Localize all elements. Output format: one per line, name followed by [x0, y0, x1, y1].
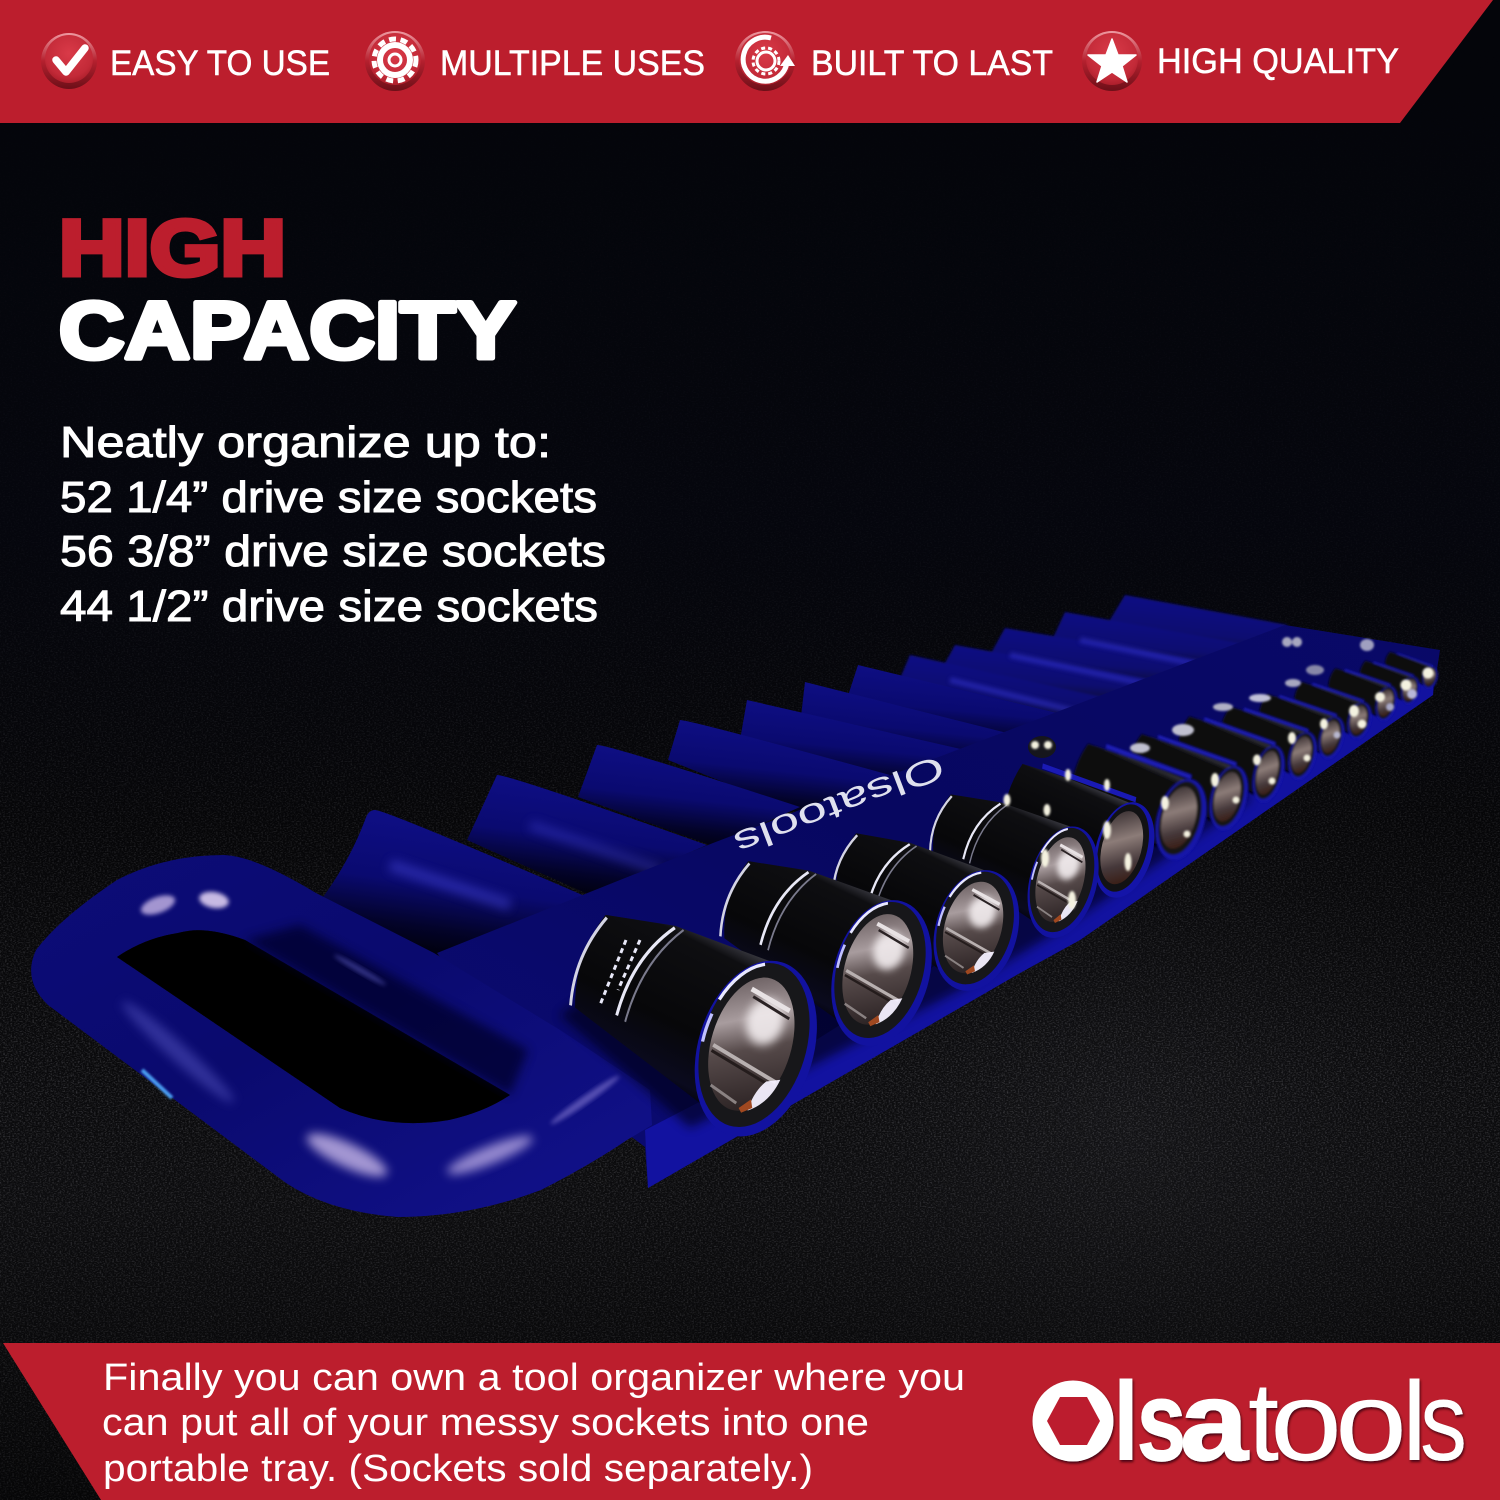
bottom description text	[102, 1357, 965, 1490]
logo: Olsatools	[1032, 1359, 1467, 1484]
logo: Olsatools: t	[1248, 1359, 1279, 1484]
tray front wall	[645, 665, 1433, 1188]
capacity text block: 56 3/8” drive size sockets	[60, 527, 606, 576]
benefit: built to last	[735, 31, 1053, 91]
handle hole shadow	[117, 930, 510, 1123]
sockets, far to near	[544, 648, 1442, 1152]
icon: gear badge	[365, 31, 425, 91]
logo: Olsatools: O	[1032, 1362, 1114, 1483]
heading: HIGH	[59, 203, 286, 292]
logo: Olsatools: l	[1402, 1359, 1427, 1484]
bottom description text: Finally you can own a tool organizer where you	[103, 1357, 965, 1399]
logo: Olsatools: o	[1335, 1359, 1407, 1484]
socket shadow on tray	[560, 770, 1250, 1128]
benefit: high quality: HIGH QUALITY	[1157, 42, 1399, 81]
benefit: easy to use: EASY TO USE	[110, 44, 330, 83]
capacity text block	[60, 418, 606, 631]
printed tray logo: Olsatools	[729, 747, 950, 862]
rear socket ribs	[323, 595, 1288, 956]
handle highlights	[116, 890, 622, 1184]
top banner	[0, 0, 1493, 123]
benefit: multiple uses: MULTIPLE USES	[440, 44, 705, 83]
bottom description text: can put all of your messy sockets into one	[102, 1402, 869, 1444]
logo: Olsatools: s	[1137, 1359, 1186, 1484]
benefit: easy to use	[41, 33, 330, 89]
logo: Olsatools: a	[1180, 1359, 1249, 1484]
icon: recycle gear badge	[735, 31, 795, 91]
socket specular highlights	[1004, 637, 1434, 909]
handle inner slope	[245, 925, 528, 1095]
benefit: multiple uses	[365, 31, 705, 91]
bottom banner	[3, 1343, 1500, 1500]
benefit: high quality	[1082, 31, 1399, 91]
benefit: built to last: BUILT TO LAST	[811, 44, 1053, 83]
far stud	[1028, 736, 1056, 758]
capacity text block: 52 1/4” drive size sockets	[60, 473, 597, 522]
capacity text block: 44 1/2” drive size sockets	[60, 582, 598, 631]
logo: Olsatools: s	[1420, 1359, 1467, 1484]
heading	[59, 203, 516, 376]
logo: Olsatools: o	[1270, 1359, 1342, 1484]
logo: Olsatools: l	[1113, 1359, 1139, 1484]
icon: star badge	[1082, 31, 1142, 91]
tray plate	[437, 625, 1440, 1188]
bottom description text: portable tray. (Sockets sold separately.)	[103, 1448, 813, 1490]
capacity text block: Neatly organize up to:	[60, 418, 551, 467]
socket engraving marks	[600, 940, 640, 1005]
icon: check badge	[41, 33, 97, 89]
product photo: blue socket tray	[31, 595, 1442, 1217]
heading: CAPACITY	[59, 286, 516, 376]
handle loop	[31, 855, 652, 1217]
